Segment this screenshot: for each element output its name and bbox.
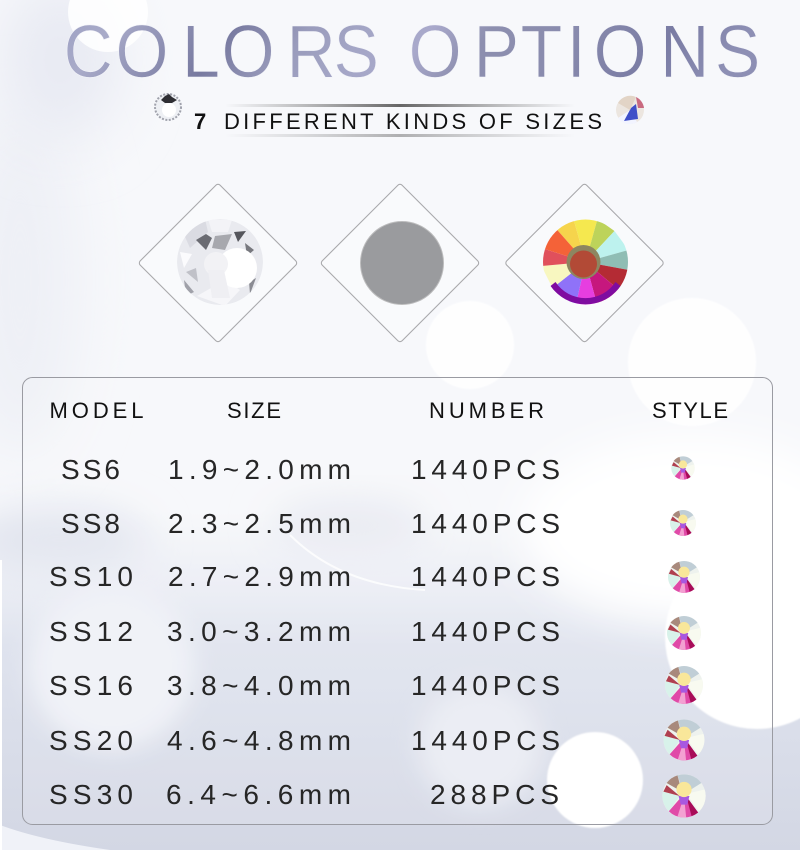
row SS30: 288PCS (430, 779, 559, 810)
icon: small clear stone (155, 94, 181, 120)
row SS20: 1440PCS (411, 725, 560, 756)
diamond frame: grey glue back (320, 183, 480, 343)
row SS20: 4.6~4.8mm (167, 725, 351, 756)
table header: NUMBER (429, 398, 544, 423)
row SS12 (49, 616, 701, 650)
row SS16: 1440PCS (411, 670, 560, 701)
table header: STYLE (652, 398, 728, 423)
diamond frame: clear stone (138, 183, 298, 343)
row SS10: SS10 (49, 561, 133, 592)
table header: SIZE (227, 398, 281, 423)
row SS30: 6.4~6.6mm (166, 779, 351, 810)
row SS8 (61, 508, 696, 539)
row SS10 (49, 561, 700, 593)
row SS20: SS20 (49, 725, 133, 756)
row SS6: SS6 (61, 454, 120, 485)
row SS10: 1440PCS (411, 561, 560, 592)
row SS30 (49, 774, 706, 818)
icon: AB rhinestone front (542, 219, 628, 306)
row SS6 (61, 454, 695, 485)
subtitle with rules: DIFFERENT KINDS OF SIZES (224, 109, 602, 134)
icon: small AB stone (616, 96, 644, 124)
row SS16: 3.8~4.0mm (167, 670, 351, 701)
row SS12: 1440PCS (411, 616, 560, 647)
row SS30: SS30 (49, 779, 133, 810)
row SS6: 1.9~2.0mm (168, 454, 351, 485)
row SS8: 1440PCS (411, 508, 560, 539)
row SS12: 3.0~3.2mm (167, 616, 351, 647)
panel: size table (22, 378, 772, 824)
table header: MODEL (50, 398, 144, 423)
row SS8: 2.3~2.5mm (168, 508, 351, 539)
subtitle with rules: 7 (194, 109, 206, 134)
title: COLORS OPTIONS (0, 11, 760, 94)
row SS16: SS16 (49, 670, 133, 701)
row SS16 (49, 666, 703, 704)
icon: grey back of stone (360, 222, 444, 304)
diamond frame: AB stone (505, 183, 664, 343)
row SS6: 1440PCS (411, 454, 560, 485)
row SS8: SS8 (61, 508, 120, 539)
row SS20 (49, 720, 704, 760)
table header (50, 398, 728, 423)
row SS12: SS12 (49, 616, 133, 647)
icon: clear rhinestone front (177, 219, 263, 306)
row SS10: 2.7~2.9mm (168, 561, 351, 592)
